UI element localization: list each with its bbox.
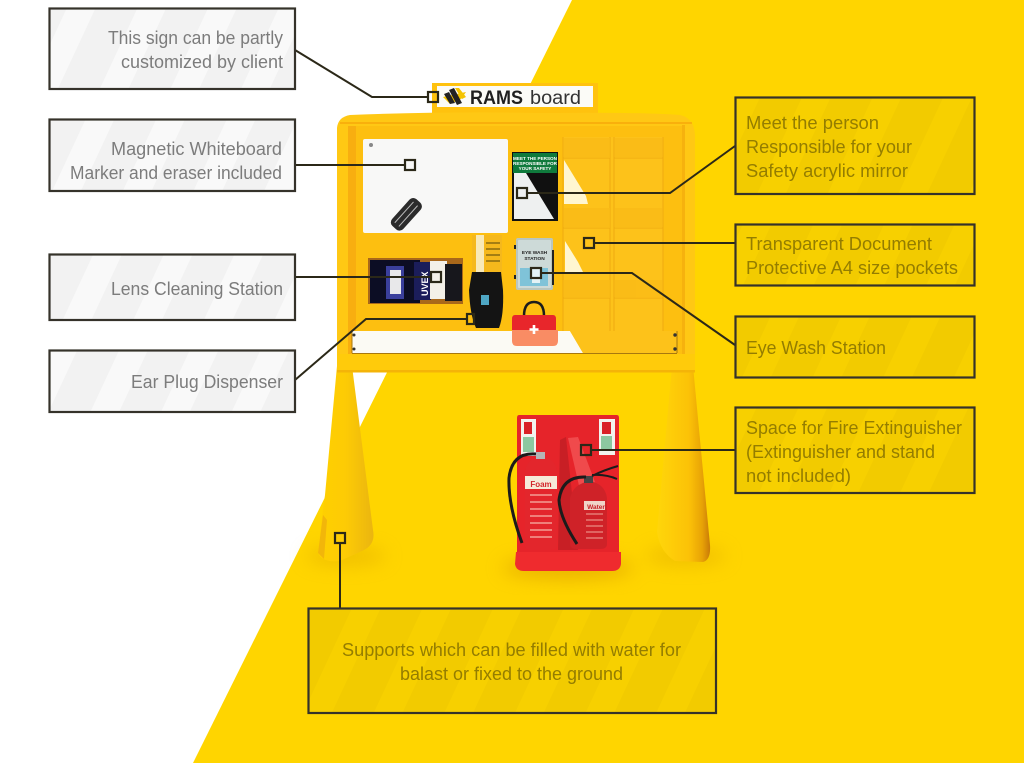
panel: safety acrylic mirror sign: RESPONSIBLE FOR: [513, 161, 558, 166]
panel: transparent document pockets: [563, 137, 663, 345]
connector: whiteboard: [295, 160, 415, 170]
water extinguisher: Water: [587, 504, 605, 511]
callout: safety mirror: Safety acrylic mirror: [746, 161, 908, 181]
callout: fire extinguisher space: (Extinguisher and stand: [746, 442, 935, 462]
callout: safety mirror: [736, 98, 974, 194]
connector: eye wash: [531, 268, 735, 345]
panel: ear plug dispenser: [469, 235, 503, 328]
board frame: [337, 112, 695, 372]
connector lines and markers: [295, 50, 735, 608]
connector: mirror: [517, 146, 735, 198]
callout: customized sign: [50, 8, 295, 89]
callout: fire extinguisher space: [736, 408, 974, 493]
icon: first aid bag: [512, 302, 558, 346]
sign plate: RAMS: [470, 88, 523, 109]
panel: magnetic whiteboard: [363, 139, 508, 233]
callout: safety mirror: Meet the person: [746, 113, 879, 133]
panel: lens cleaning station: UVEX: [420, 271, 430, 296]
connector: fire extinguisher: [581, 445, 735, 455]
callout: eye wash station: [736, 316, 974, 378]
RAMS board product: [306, 83, 726, 579]
sign plate: [432, 83, 598, 115]
shelf: [352, 331, 677, 354]
foam extinguisher: Foam: [530, 480, 552, 489]
panel: eye wash station: [515, 238, 553, 290]
callout: lens cleaning station: [50, 254, 295, 320]
callout: ear plug dispenser: [50, 350, 295, 412]
panel: fire extinguishers on stand: [509, 415, 621, 571]
left support leg: [318, 366, 374, 561]
callout: document pockets: Transparent Document: [746, 234, 932, 254]
extinguisher safety signs: [521, 419, 615, 456]
callout: document pockets: Protective A4 size pockets: [746, 258, 958, 278]
sign plate: board: [530, 88, 581, 109]
panel: safety acrylic mirror sign: YOUR SAFETY: [519, 166, 551, 171]
callout: magnetic whiteboard: Magnetic Whiteboard: [111, 139, 282, 159]
connector: supports: [335, 533, 345, 608]
callout: fire extinguisher space: Space for Fire Extinguisher: [746, 418, 962, 438]
connector: pockets: [584, 238, 735, 248]
foam extinguisher: [509, 452, 557, 550]
floor shadows: [306, 547, 726, 579]
callout: customized sign: This sign can be partly: [108, 28, 283, 48]
callout: supports: Supports which can be filled with water for: [342, 640, 681, 660]
callout: supports: [308, 608, 716, 713]
callout: safety mirror: Responsible for your: [746, 137, 912, 157]
callout: supports: balast or fixed to the ground: [400, 664, 623, 684]
panel: safety acrylic mirror sign: MEET THE PERSON: [513, 156, 558, 161]
callout: fire extinguisher space: not included): [746, 466, 851, 486]
icon: RAMS bee logo: [443, 88, 466, 105]
callout: eye wash station: Eye Wash Station: [746, 338, 886, 358]
callout: ear plug dispenser: Ear Plug Dispenser: [131, 372, 283, 392]
connector: lens cleaning: [295, 272, 441, 282]
water extinguisher: [559, 466, 618, 549]
icon: marker and eraser: [389, 196, 424, 233]
right support leg: [657, 366, 710, 562]
panel: lens cleaning station: [368, 258, 463, 304]
panel: safety acrylic mirror sign: [512, 152, 558, 221]
connector: ear plugs: [295, 314, 474, 380]
callout: lens cleaning station: Lens Cleaning Station: [111, 279, 283, 299]
callout: document pockets: [736, 224, 974, 286]
panel: eye wash station: EYE WASH: [522, 250, 548, 256]
callout: magnetic whiteboard: [50, 120, 295, 191]
panel: eye wash station: STATION: [524, 256, 545, 262]
callout: customized sign: customized by client: [121, 52, 283, 72]
callout: magnetic whiteboard: Marker and eraser included: [70, 163, 282, 183]
connector: sign: [295, 50, 438, 102]
